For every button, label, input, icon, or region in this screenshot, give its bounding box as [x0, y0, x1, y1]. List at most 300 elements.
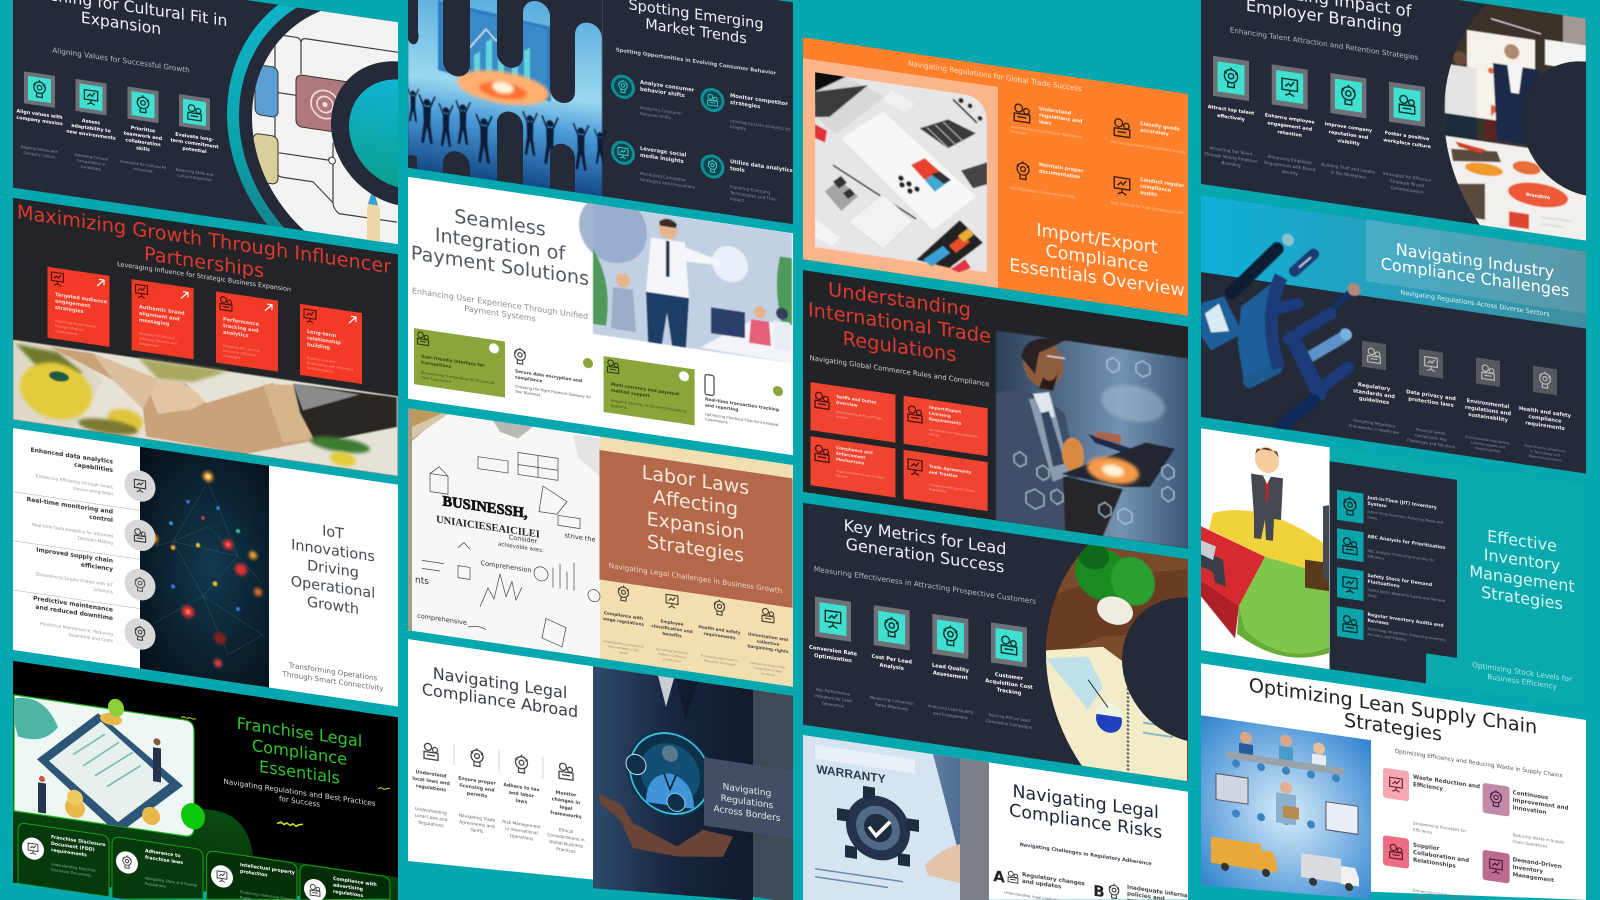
card 2: alignment and	[139, 311, 180, 323]
title: Affecting	[653, 485, 738, 521]
card 1: Understanding Tariffs and Trade	[836, 410, 882, 421]
image: tablet contract	[8, 694, 194, 845]
step 2: Rates Effectively	[875, 702, 909, 712]
column 1: local laws and	[412, 776, 450, 787]
column 1: guidelines	[1359, 396, 1389, 406]
column 1: Sector	[619, 650, 629, 656]
title: Generation Success	[846, 534, 1004, 577]
item 3: Key Regulations in International Trade	[1011, 186, 1075, 199]
title: Innovations	[291, 537, 375, 565]
card 3: Performance	[223, 317, 259, 328]
column 1	[1349, 339, 1399, 435]
item 4: and reduced downtime	[35, 604, 113, 622]
item 1: behavior shifts	[640, 87, 685, 99]
title: Regulations	[843, 327, 956, 367]
card 4	[705, 374, 783, 433]
subtitle: Business Efficiency	[1487, 672, 1557, 691]
item 2: Chain Operations	[1513, 839, 1547, 849]
panel: inventory management slide	[1201, 428, 1586, 707]
step 3	[1321, 72, 1376, 181]
step 2	[1264, 63, 1315, 179]
column 2: classification and	[651, 623, 693, 634]
column 1	[603, 582, 644, 658]
image: flowchart	[252, 11, 398, 244]
image: warranty document with gear: WARRANTY	[816, 762, 886, 786]
subtitle: Navigating Challenges in Regulatory Adherence	[1020, 842, 1152, 867]
item 2: ABC Analysis for Prioritization	[1368, 534, 1445, 551]
item 4	[1337, 606, 1446, 652]
column 1: regulations	[416, 783, 446, 794]
step 1: Company Culture	[23, 151, 56, 160]
item 3: media insights	[640, 153, 684, 165]
column 4: Considerations in	[547, 832, 585, 843]
subtitle: Optimizing Efficiency and Reducing Waste in Supply Chains	[1395, 749, 1563, 779]
step 2: Analysis	[880, 662, 904, 672]
step 1	[16, 70, 63, 161]
column 4: Unionization and	[748, 631, 788, 642]
subtitle: Enhancing Talent Attraction and Retention Strategies	[1230, 25, 1418, 62]
item 4: Technology Integration: Enhancing Inventory	[1368, 627, 1446, 642]
card 4: relationship	[307, 335, 341, 346]
risk A: A	[993, 867, 1005, 887]
title: International Trade	[808, 298, 991, 348]
title: Essentials Overview	[1009, 256, 1185, 301]
title: Compliance Risks	[1009, 801, 1162, 843]
item 4: Downtime and Costs	[69, 632, 114, 645]
card 2: Influencer Selection and	[139, 336, 177, 346]
title: Partnerships	[144, 242, 264, 283]
column 3	[502, 752, 541, 844]
item 4: Best Practices for Trade Compliance Audits	[1111, 201, 1184, 215]
card 1: User-friendly interface for	[421, 355, 484, 369]
image: businessman on pie chart	[1201, 428, 1330, 669]
item 1: Understanding Import/Export Regulations	[1011, 125, 1081, 139]
column 1: Compliance with	[604, 610, 643, 621]
column 3: Expansion Strategies	[704, 658, 736, 667]
column 2	[1406, 347, 1456, 449]
panel: international trade slide	[803, 270, 1188, 549]
item 4	[1111, 173, 1185, 215]
step 4: term commitment	[170, 137, 219, 151]
column 4: Data Privacy Compliance	[1524, 444, 1566, 454]
card 4: Optimizing Checkout Flow for Increased	[705, 412, 778, 427]
step 2: Candidates	[81, 165, 101, 172]
panel: payment solutions slide	[408, 165, 793, 455]
card 1: Understanding Franchise	[51, 862, 96, 873]
item 4: Demand-Driven	[1513, 857, 1562, 870]
card 2: Engagement	[139, 341, 160, 348]
card 3: Campaigns	[223, 354, 241, 360]
step 3: Lead Quality	[932, 663, 969, 674]
column 2	[651, 592, 693, 665]
card 2: Key Elements of Trade Agreement	[929, 428, 978, 439]
item 3	[1337, 567, 1445, 613]
image: business sketches: achievable axes:	[498, 542, 544, 554]
card 4: Real-time transaction tracking	[705, 397, 779, 413]
image: executive with digital ship	[996, 330, 1188, 549]
step 2: Cost Per Lead	[871, 654, 912, 666]
card 2: Import/Export	[929, 405, 961, 414]
card 4: Long-term	[307, 329, 336, 339]
card 4: Trade Agreements	[929, 464, 971, 475]
callout text: Across Borders	[714, 804, 781, 824]
title: Expansion	[81, 8, 161, 38]
inner dark disc	[1122, 588, 1266, 753]
item 4: Predictive maintenance	[33, 595, 113, 614]
card 3: Intellectual property	[240, 863, 295, 876]
step 1: effectively	[1217, 113, 1245, 123]
card 4	[904, 450, 988, 511]
card 1: User Experience	[421, 376, 452, 384]
card 1: Disclosure Documents	[51, 868, 91, 878]
item 3: Collaboration and	[1413, 850, 1469, 864]
panel: cultural fit slide	[13, 0, 398, 244]
item 2: Continuous	[1513, 790, 1548, 801]
image: suited figure with holographic globe	[593, 666, 793, 900]
card 3: Systems	[611, 404, 627, 410]
item 1: regulations and	[1039, 113, 1083, 125]
title: Labor Laws	[642, 461, 749, 499]
column 2: Jurisdictions	[662, 657, 681, 663]
card 3: Measuring ROI: Success	[223, 344, 260, 353]
card 4: Regulations	[929, 487, 946, 494]
item 2	[1111, 117, 1186, 155]
subtitle: Spotting Opportunities in Evolving Consumer Behavior	[616, 47, 777, 77]
subtitle: Navigating Legal Challenges in Business Growth	[609, 561, 782, 595]
column 4: in Technology and	[1530, 449, 1560, 458]
step 1: Conversion Rate	[809, 645, 857, 658]
step 3	[927, 613, 974, 721]
item 3: Fluctuations	[1368, 579, 1400, 590]
card 1: requirements	[51, 847, 87, 859]
item 2: ABC Analysis: Prioritizing Inventory for	[1368, 549, 1435, 563]
item 3: Leverage social	[640, 146, 686, 159]
step 4: Communication	[1390, 185, 1424, 195]
risk B: Inadequate internal	[1127, 885, 1190, 900]
step 4: workplace culture	[1383, 137, 1431, 150]
step 2: Assessing Cultural	[74, 153, 108, 162]
column 1: Frameworks in Healthcare	[1349, 423, 1399, 435]
column 4: Global Business	[549, 839, 584, 850]
card 2: compliance	[515, 374, 542, 384]
column 2: Data privacy and	[1406, 389, 1456, 402]
column 2: Rights in Different	[658, 652, 686, 660]
card 2: Adherence to	[145, 849, 180, 859]
subtitle: Navigating Regulations and Best Practices	[224, 777, 375, 808]
step 2: Identity	[1282, 169, 1298, 176]
inner teal disc	[349, 80, 398, 188]
column 1: Understanding	[415, 807, 447, 817]
risk A: and updates	[1022, 879, 1062, 891]
header band	[1201, 195, 1586, 329]
item 3: Monitoring Competitor	[640, 171, 686, 183]
card 3: Enforcement	[836, 451, 865, 460]
column 4: Practices	[556, 846, 576, 855]
column 4	[747, 606, 789, 679]
column 2: Challenges and Solutions	[1407, 437, 1455, 449]
card 3: Impact of Trade Policies on Global	[836, 469, 885, 480]
step 2: Enhancing Employee	[1268, 154, 1312, 165]
card 1: Targeted audience	[55, 292, 107, 306]
item 1: Analyze consumer	[640, 80, 694, 94]
card 1: Tariffs and Duties	[836, 394, 876, 405]
card 1: Barriers	[836, 414, 848, 420]
step 2: engagement and	[1267, 120, 1312, 133]
item 4: Exploring Emerging	[730, 184, 770, 195]
panel: compliance risks slide	[803, 735, 1190, 900]
brown title block	[600, 450, 792, 608]
item 1: Just-in-Time (JIT) Inventory	[1368, 496, 1437, 511]
item 4: Predictive Maintenance: Reducing	[40, 622, 113, 638]
step 2: Enhance employee	[1265, 113, 1315, 126]
title: Payment Solutions	[411, 241, 589, 290]
item 4: Technologies and Their	[729, 190, 777, 202]
column 3	[1465, 356, 1511, 455]
image: business sketches: BUSINESSH,	[443, 493, 528, 522]
item 3: Strategies and Innovations	[640, 177, 695, 190]
image: business sketches: UNIAICIESEAICILEI	[436, 514, 540, 541]
step 2: Measuring Conversion	[869, 694, 914, 706]
card 2: Policies	[929, 432, 940, 438]
column 3: Health and safety	[698, 624, 741, 635]
item 2: Reducing Waste in Supply	[1513, 832, 1564, 845]
column 2: Compliance: Key	[1415, 433, 1448, 442]
item 1	[1337, 490, 1443, 535]
item 1	[1383, 768, 1480, 842]
item 3	[611, 139, 695, 190]
step 3: Strategies for Cultural Fit	[120, 159, 166, 170]
step 4: Tracking	[997, 687, 1022, 697]
step 2: Assess	[82, 119, 100, 126]
step 3	[120, 85, 167, 176]
title: Management	[1469, 562, 1575, 596]
card 1: Maximizing Brand Visibility	[55, 319, 97, 329]
item 4: tools	[730, 166, 745, 174]
subtitle: Aligning Values for Successful Growth	[52, 45, 190, 75]
column 3: requirements	[704, 631, 736, 641]
step 3: and Engagement	[933, 710, 968, 720]
image: warranty document with gear	[803, 735, 960, 900]
item 2: Decision-Making	[78, 535, 113, 547]
column 2: Financial Sector	[1416, 427, 1446, 436]
item 2	[700, 86, 791, 138]
card 3: tracking and	[223, 323, 259, 334]
column 4: Health and safety	[1519, 406, 1571, 419]
column 2: Navigating Employee	[656, 647, 688, 655]
step 2: Engagement with Brand	[1264, 160, 1315, 172]
title: Expansion	[647, 507, 744, 544]
item 1: Enhancing Efficiency through Smart	[36, 474, 113, 491]
item 2: Real-time Data Analytics for Informed	[32, 523, 113, 540]
item 3: Relationships	[1413, 857, 1456, 870]
panel: legal compliance abroad slide	[408, 639, 793, 900]
title: Navigating Legal	[433, 664, 567, 702]
step 4: potential	[182, 146, 207, 155]
card 2: Requirements	[929, 416, 962, 426]
card 3: Compliance and	[836, 445, 873, 455]
step 1: Branding	[1222, 160, 1241, 168]
item 2	[1337, 528, 1445, 574]
step 1: company mission	[16, 115, 63, 128]
card 2: Regulations	[145, 882, 166, 889]
step 2: adaptability to	[71, 123, 111, 135]
risk A: Regulatory changes	[1022, 872, 1085, 887]
step 4: Generation Campaigns	[986, 718, 1032, 730]
card 1: Franchise Disclosure	[51, 835, 106, 848]
column 2: benefits	[662, 631, 682, 639]
item 4: Management	[1513, 872, 1554, 884]
card 1: Collaborations	[55, 329, 78, 336]
step 1: Align values with	[17, 109, 62, 121]
item 1	[1011, 102, 1083, 144]
column 2: protection laws	[1408, 396, 1454, 409]
image: business sketches: comprehensive	[417, 612, 467, 627]
item 1	[31, 447, 113, 498]
title: Market Trends	[645, 16, 747, 47]
item 4: Inventory	[1513, 865, 1543, 875]
item 2: Insights	[730, 124, 746, 131]
image: business sketches: Consider	[509, 533, 538, 545]
card 3: Multi-currency and payment	[611, 383, 679, 398]
card 1	[48, 267, 110, 347]
item 2: Monitor competitor	[730, 93, 788, 108]
card 4: Compliance with Export Control	[929, 483, 975, 493]
step 4: Strategies for Effective	[1383, 171, 1431, 183]
image: support team illustration	[579, 190, 792, 363]
card 4	[300, 864, 390, 900]
item 2: Improvement and	[1513, 798, 1569, 812]
item 2: Key Documentation for Compliance Success	[1111, 140, 1186, 155]
title: Import/Export	[1036, 221, 1158, 258]
step 2	[66, 78, 116, 174]
subtitle: for Success	[279, 794, 320, 809]
item 1: Analyzing Consumer	[640, 105, 682, 116]
item 4: audits	[1140, 190, 1157, 198]
step 4	[1383, 81, 1431, 196]
column 4: Competition in New	[753, 666, 783, 674]
item 1: Waste Reduction and	[1413, 774, 1480, 790]
column 3: Environmental Regulations:	[1465, 435, 1511, 446]
column 1: Regulatory	[1358, 382, 1390, 393]
card 4: advertising	[333, 882, 363, 893]
column 2: Agreements and	[459, 819, 495, 830]
item 2: Classify goods	[1140, 121, 1180, 133]
step 2	[869, 604, 914, 713]
item 3: Risks	[1368, 593, 1377, 599]
item 2	[27, 496, 113, 547]
step 3: collaboration	[125, 137, 161, 148]
card 4: Conversions	[705, 417, 728, 425]
title: Growth	[307, 594, 359, 618]
card 1: transactions	[421, 360, 452, 370]
title: Navigating Industry	[1396, 240, 1554, 282]
peach backdrop	[803, 58, 998, 288]
subtitle: Measuring Effectiveness in Attracting Prospective Customers	[814, 564, 1036, 606]
column 3: Responsibilities	[1475, 446, 1501, 454]
step 4: Evaluate long-	[175, 133, 214, 143]
callout text: Regulations	[721, 794, 774, 811]
card 4: Building Long-Term	[307, 356, 336, 364]
step 3: Interviews	[133, 167, 153, 174]
panel: employer branding slide	[1201, 0, 1600, 259]
column 1: Understand	[416, 770, 446, 780]
panel: import export slide	[803, 37, 1188, 316]
column 3	[698, 596, 741, 668]
item 2: control	[89, 514, 113, 524]
card 4: building	[307, 342, 330, 351]
column 2: Tariffs	[470, 827, 484, 835]
card 3: method support	[611, 388, 650, 399]
title: Essentials	[259, 757, 340, 788]
column 4: Monitor	[556, 791, 576, 799]
card 1: Through Influencer	[54, 324, 85, 332]
card 1: strategies	[55, 305, 84, 315]
title: Compliance Abroad	[422, 680, 578, 721]
panel: lead generation slide	[803, 433, 1266, 801]
title: Strategies	[647, 530, 744, 567]
card 2: Navigating State and Federal	[145, 876, 197, 888]
subtitle: Optimizing Stock Levels for	[1472, 660, 1572, 684]
column 3: Risk Management	[502, 820, 541, 831]
card 1	[414, 328, 505, 397]
step 3: in the Workplace	[1331, 170, 1366, 180]
step 2: Compatibility in	[76, 159, 106, 167]
card 2: Strategies for Effective	[139, 331, 175, 340]
column 2: Ensure proper	[458, 776, 496, 787]
step 1	[809, 596, 857, 711]
card 1: Streamlining Transactions for Enhanced	[421, 371, 494, 385]
item 4	[33, 595, 114, 645]
title: Navigating Legal	[1013, 782, 1159, 823]
image: presenter at flipcharts	[1441, 0, 1600, 251]
title: Understanding	[828, 278, 971, 322]
column 3: Industry Impacts and	[1471, 440, 1505, 450]
card 1: Overview	[836, 400, 858, 408]
item 4: Regular Inventory Audits and	[1368, 613, 1444, 629]
image: crowd and data burst	[407, 0, 606, 197]
accent blobs	[108, 698, 390, 830]
column 3: Adhere to tax	[503, 783, 540, 793]
item 3: Safety Stock: Balancing Supply and Demand	[1368, 588, 1445, 603]
card 1: engagement	[55, 298, 91, 310]
column 1: Regulations	[418, 820, 444, 829]
title: Strategies	[1344, 708, 1442, 746]
title: Effective	[1487, 526, 1557, 556]
card 4: and reporting	[705, 402, 738, 413]
column 1: wage regulations	[603, 616, 644, 627]
step 1	[1203, 54, 1258, 170]
image: business sketches: Comprehension	[481, 559, 531, 574]
item 1: capabilities	[74, 461, 113, 474]
column 2	[458, 745, 496, 837]
icon: teal ring	[227, 4, 320, 228]
card 1	[18, 822, 109, 897]
column 4: bargaining rights	[747, 643, 789, 654]
item 2: Innovation	[1513, 805, 1546, 816]
step 3: Analyzing Lead Quality	[927, 703, 973, 715]
subtitle: Through Smart Connectivity	[281, 669, 384, 693]
card 1	[810, 382, 896, 443]
step 4: Employer Brand	[1390, 178, 1424, 188]
column 4: compliance	[1528, 414, 1562, 425]
column 1: Requirements in the	[608, 644, 639, 653]
item 3: Supplier	[1413, 842, 1439, 852]
column 2: Employee	[660, 618, 684, 627]
item 3	[36, 546, 114, 596]
card 2: franchise laws	[145, 855, 183, 866]
item 4: Utilize data analytics	[730, 159, 793, 174]
callout text: Navigating	[723, 782, 771, 799]
